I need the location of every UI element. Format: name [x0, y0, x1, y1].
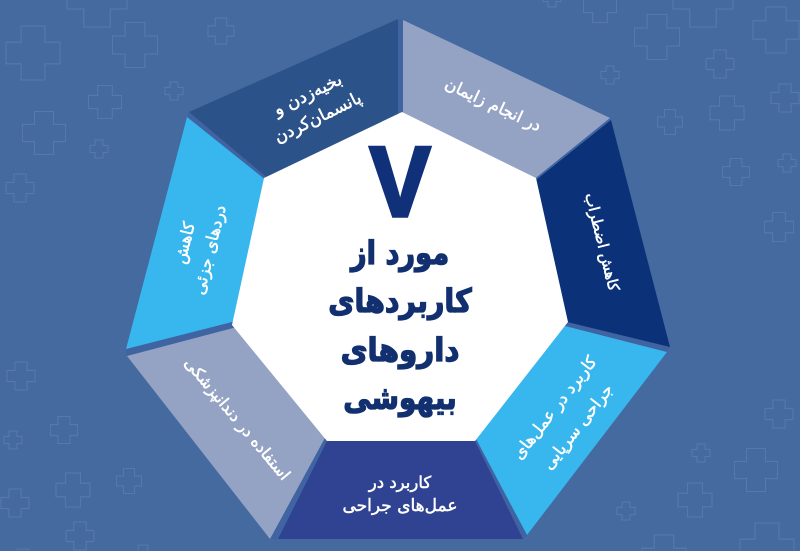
panel: stitching and dressing: بخیه‌زدن و — [269, 70, 346, 121]
panel: minor pain reduction: کاهش — [170, 220, 199, 266]
title text: کاربردهای — [328, 283, 472, 321]
panel: surgical operations — [278, 437, 523, 539]
panel: outpatient surgery: جراحی سرپایی — [538, 380, 618, 474]
panel: anxiety reduction — [531, 120, 670, 347]
panel: outpatient surgery — [475, 326, 667, 535]
panel: minor pain reduction — [126, 117, 267, 349]
panel: outpatient surgery: کاربرد در عمل‌های — [509, 352, 602, 464]
title text — [328, 235, 472, 418]
heptagon underlay — [126, 19, 670, 539]
panel: in childbirth: در انجام زایمان — [442, 74, 544, 136]
title text: داروهای — [341, 332, 459, 369]
centre panel — [232, 112, 568, 441]
title text: بیهوشی — [343, 380, 457, 418]
panel: anxiety reduction: کاهش اضطراب — [581, 191, 623, 294]
panel: surgical operations: عمل‌های جراحی — [342, 496, 458, 516]
panel: stitching and dressing — [189, 19, 398, 180]
title text: مورد از — [349, 235, 449, 273]
panel: in childbirth — [403, 20, 610, 181]
panel: dentistry: استفاده در دندانپزشکی — [180, 353, 294, 485]
panel: stitching and dressing: پانسمان‌کردن — [271, 88, 365, 148]
title number 7: V — [370, 128, 430, 238]
panel: minor pain reduction: دردهای جزئی — [189, 203, 231, 297]
panel: surgical operations: کاربرد در — [368, 473, 431, 493]
panel: dentistry — [127, 327, 326, 539]
